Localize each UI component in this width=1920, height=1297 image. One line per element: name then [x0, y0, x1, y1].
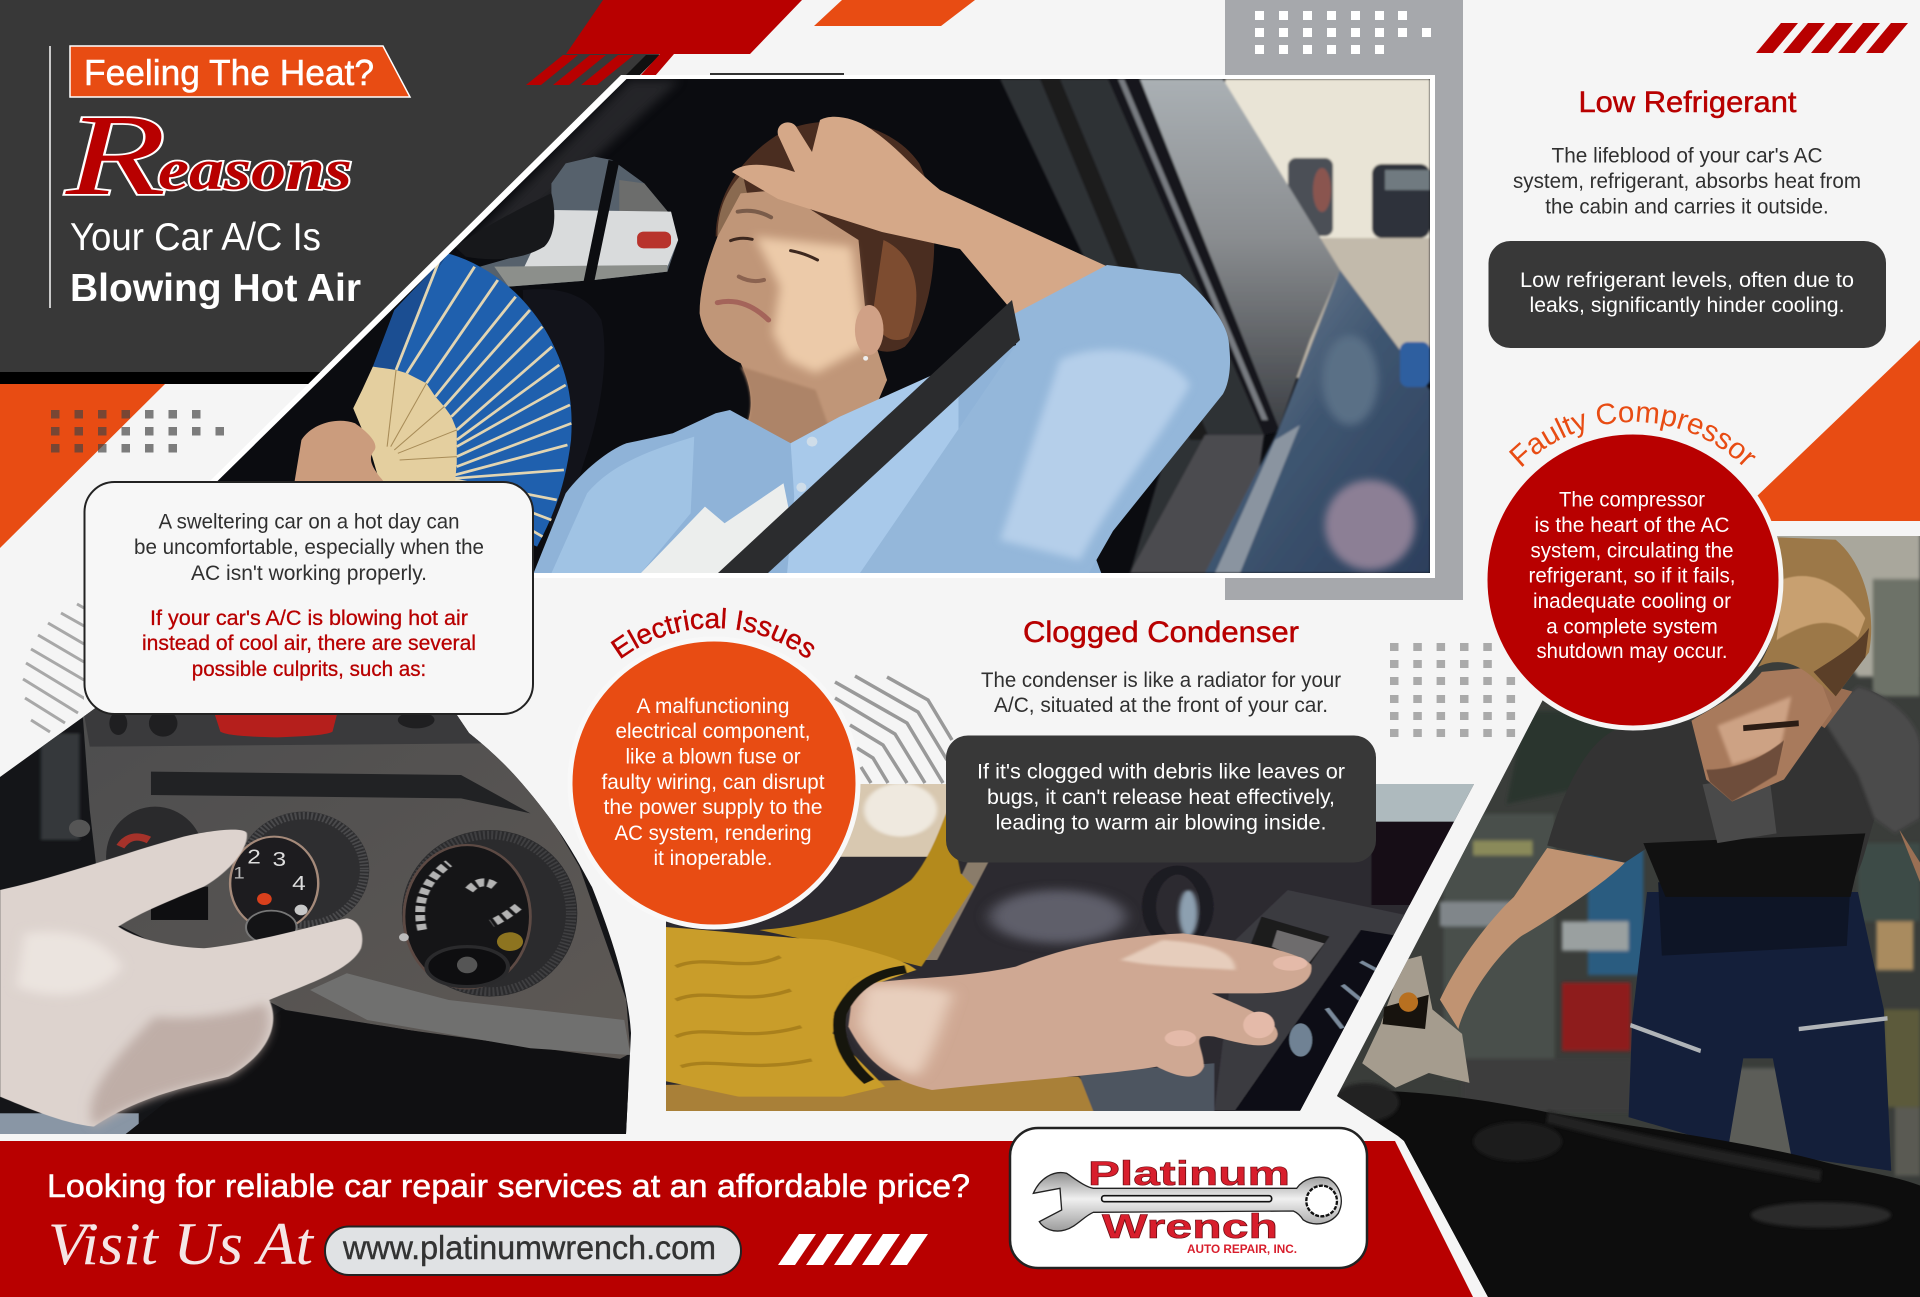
circle text: faulty wiring, can disrupt [602, 771, 825, 794]
facial features [717, 211, 817, 320]
orange triangle right [1731, 340, 1920, 521]
hair [716, 122, 934, 352]
ear [855, 305, 883, 361]
face [1691, 667, 1832, 802]
temperature dial: 2 [247, 845, 261, 868]
left vertical rule [49, 46, 51, 308]
script word: Reasons: easons [158, 137, 352, 202]
dark callout: Low refrigerant levels, often due to [1520, 269, 1854, 292]
dark callout: If it's clogged with debris like leaves or [977, 760, 1345, 784]
woman and fan traced group [294, 80, 1101, 573]
circle text: A malfunctioning [636, 695, 790, 718]
section: Clogged Condenser [946, 616, 1376, 862]
circle text: shutdown may occur. [1536, 640, 1728, 663]
rear side window [480, 157, 678, 287]
body text: The condenser is like a radiator for your [981, 669, 1341, 692]
circle text: inadequate cooling or [1533, 590, 1731, 613]
circle text: The compressor [1559, 488, 1705, 512]
circle text: refrigerant, so if it fails, [1528, 564, 1736, 588]
dark callout [946, 736, 1376, 862]
intro paragraph: A sweltering car on a hot day can [158, 510, 460, 534]
seat [523, 289, 604, 547]
badge: Feeling The Heat?: Feeling The Heat? [84, 52, 374, 93]
circle text: is the heart of the AC [1534, 514, 1730, 537]
circle text [602, 695, 825, 870]
script word: Reasons [65, 92, 352, 220]
circle text: AC system, rendering [614, 822, 812, 845]
url pill [325, 1226, 741, 1275]
right arm [1899, 828, 1920, 882]
red paragraph [142, 607, 476, 681]
body text [1513, 144, 1861, 218]
icon: wrench [1033, 1173, 1341, 1231]
hand [0, 830, 362, 1127]
dark recess band [151, 772, 530, 813]
blurred background [660, 780, 1481, 960]
photo: mechanic working on engine [1330, 530, 1920, 1297]
body text: system, refrigerant, absorbs heat from [1513, 170, 1861, 193]
small knobs [109, 715, 434, 736]
sleeve highlight [1000, 350, 1190, 560]
dash console with vents [1214, 890, 1413, 1110]
hair [1758, 537, 1871, 696]
dark callout: leading to warm air blowing inside. [996, 812, 1326, 834]
dots left [51, 410, 224, 452]
ear and neck [1814, 682, 1852, 728]
circle [1485, 432, 1781, 728]
photo: hand turning A/C dial [0, 708, 631, 1134]
lower sweater [660, 927, 916, 1097]
intro paragraph [134, 510, 484, 585]
red paragraph: possible culprits, such as: [192, 658, 426, 681]
stripes top right [1756, 23, 1908, 53]
circle text: electrical component, [616, 720, 810, 743]
face and neck [700, 191, 887, 424]
temperature dial: 3 [273, 848, 286, 870]
body text: The lifeblood of your car's AC [1552, 144, 1822, 168]
logo word: Wrench: Wrench [1102, 1208, 1278, 1246]
headrest [455, 193, 554, 259]
parked cars and lot [1225, 79, 1430, 378]
body text: the cabin and carries it outside. [1545, 196, 1829, 218]
circle text: system, circulating the [1530, 540, 1734, 562]
script word: Reasons: R [65, 92, 166, 220]
raised arm and hand on forehead [732, 117, 1115, 320]
glove [1362, 956, 1469, 1088]
dashboard panel [82, 700, 630, 1063]
lower sweater and seat [660, 1077, 1110, 1113]
sleeve [860, 265, 1230, 573]
car body [1205, 270, 1430, 573]
neck and tee [1703, 775, 1777, 843]
logo tagline: AUTO REPAIR, INC. [1187, 1244, 1297, 1256]
heading line 2: Blowing Hot Air [70, 267, 361, 310]
circle text: a complete system [1546, 616, 1718, 638]
blurred garage background [1440, 530, 1920, 1176]
circle text [1528, 488, 1736, 663]
curved heading: Faulty Compressor [1508, 403, 1756, 467]
panel: dark title background [0, 0, 660, 384]
white frame of main photo [126, 75, 1435, 578]
dashboard side controls [0, 733, 139, 1137]
logo: Platinum Wrench Auto Repair [1010, 1128, 1367, 1268]
temperature dial [230, 812, 369, 944]
hatch lines center [835, 676, 952, 783]
left dial [106, 807, 208, 920]
door window glass [1140, 79, 1340, 431]
red paragraph: instead of cool air, there are several [142, 632, 476, 655]
forearm [1440, 848, 1625, 1029]
dots on grey panel [1255, 11, 1431, 54]
circle text: like a blown fuse or [626, 746, 801, 768]
intro text box [84, 482, 533, 714]
white t-shirt [641, 483, 789, 573]
logo word: Platinum: Platinum [1088, 1155, 1290, 1193]
intro paragraph: be uncomfortable, especially when the [134, 536, 484, 559]
circle [570, 639, 858, 927]
upper sleeve [759, 810, 974, 967]
hand [848, 933, 1311, 1090]
call to action: Looking for reliable car repair services at an affordable price? [47, 1168, 970, 1204]
title block [65, 46, 410, 310]
badge: Feeling The Heat? [70, 46, 410, 97]
thin dark line [710, 73, 844, 76]
curved heading: Electrical Issues [610, 608, 814, 659]
overalls [1629, 882, 1891, 1171]
red paragraph: If your car's A/C is blowing hot air [150, 607, 468, 630]
intro paragraph: AC isn't working properly. [191, 562, 427, 585]
fan symbol [295, 905, 308, 915]
temperature dial: 4 [292, 872, 306, 894]
section: Faulty Compressor [1488, 403, 1822, 730]
shirt right of belt [787, 363, 958, 573]
dark callout [1488, 241, 1886, 348]
dark callout: bugs, it can't release heat effectively, [987, 786, 1335, 809]
engine bay [1340, 1091, 1920, 1297]
shirt [1547, 687, 1920, 882]
body text [981, 669, 1341, 717]
fade along diagonal [477, 79, 676, 232]
neck shade [740, 366, 828, 443]
white stripes [778, 1234, 928, 1265]
orange triangle left [0, 384, 165, 548]
url pill: www.platinumwrench.com [342, 1229, 716, 1266]
sunlight on face [755, 237, 866, 373]
orange top accent [814, 0, 975, 26]
shirt buttons [796, 437, 817, 492]
dots center right [1390, 643, 1515, 737]
seat belt [718, 300, 1020, 573]
script: Visit Us At: Visit Us At [48, 1211, 314, 1277]
bib shadow [1643, 833, 1865, 897]
white diagonal edge on photo [214, 77, 625, 481]
red angled shape with stripes [526, 0, 802, 85]
vent band [84, 708, 482, 746]
dark callout: leaks, significantly hinder cooling. [1530, 294, 1844, 317]
fan-speed dial [399, 830, 577, 997]
circle text: the power supply to the [604, 796, 822, 819]
heading: Clogged Condenser [1023, 616, 1299, 649]
temperature dial: 1 [233, 863, 245, 882]
photo: woman fanning herself in hot car [130, 79, 1430, 573]
hatch lines left [23, 604, 87, 732]
section: Electrical Issues [572, 608, 898, 930]
section: Low Refrigerant [1488, 86, 1886, 348]
photo: hand at dashboard vents [660, 780, 1481, 1120]
heading line 1: Your Car A/C Is [70, 216, 321, 259]
panel bottom lip [310, 973, 630, 1055]
red hazard button [215, 715, 337, 738]
fan [294, 253, 572, 547]
red indicator [257, 893, 272, 905]
circle text: it inoperable. [654, 847, 772, 870]
heading: Low Refrigerant [1578, 86, 1797, 119]
blue shirt torso [534, 345, 1101, 573]
wrist band [839, 969, 906, 1082]
footer banner [0, 1141, 1473, 1297]
hand holding fan [294, 421, 385, 483]
body text: A/C, situated at the front of your car. [994, 694, 1328, 717]
door frame [1000, 79, 1280, 573]
lower black trim [126, 1024, 628, 1134]
grey backing panel [1225, 0, 1463, 600]
